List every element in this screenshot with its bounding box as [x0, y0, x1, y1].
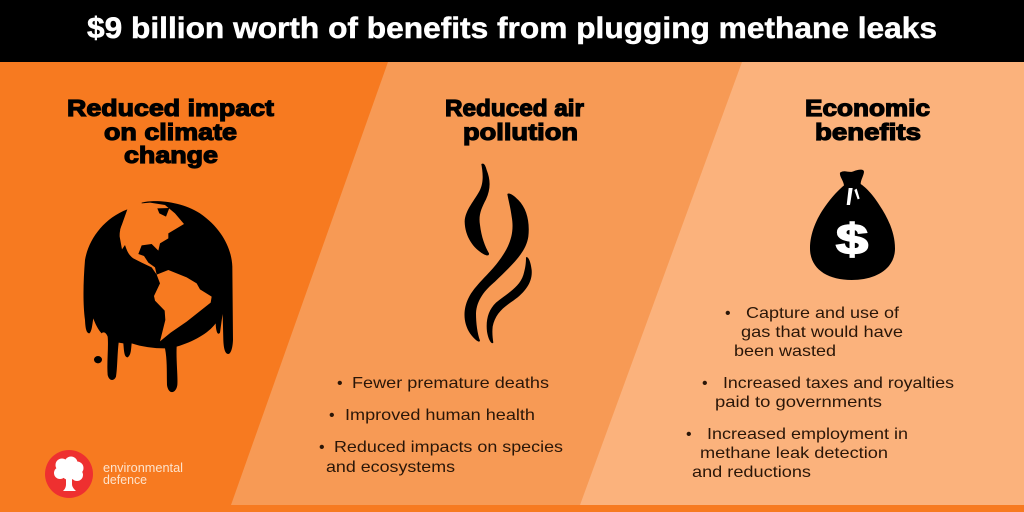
title banner — [0, 0, 1024, 62]
heading: reduced impact on climate change: change — [124, 142, 218, 168]
text block: air pollution bullets: Fewer premature deaths — [352, 375, 549, 392]
logo: environmental defence: defence — [103, 473, 147, 487]
text block: economic bullets: gas that would have — [741, 324, 903, 341]
text block: economic bullets: Increased taxes and royalties — [723, 375, 954, 392]
heading: reduced impact on climate change: on climate — [104, 119, 237, 145]
text block: economic bullets: paid to governments — [715, 394, 882, 411]
logo: environmental defence: environmental — [103, 461, 183, 475]
south america — [154, 270, 212, 341]
text block: economic bullets: and reductions — [692, 464, 811, 481]
panel: economic background — [580, 62, 1024, 505]
icon: rising smoke — [464, 164, 532, 343]
heading: reduced air pollution: Reduced air — [445, 95, 584, 121]
text block: air pollution bullets: • — [319, 439, 325, 456]
heading: economic benefits: Economic — [805, 95, 930, 121]
text block: economic bullets: • — [702, 375, 708, 392]
heading: economic benefits: benefits — [815, 119, 921, 145]
heading: reduced impact on climate change: Reduced impact — [67, 95, 274, 121]
text block: economic bullets: • — [686, 426, 692, 443]
text block: economic bullets: methane leak detection — [700, 445, 888, 462]
icon: melting globe — [83, 201, 233, 392]
text block: air pollution bullets: • — [329, 407, 335, 424]
heading: economic benefits — [805, 95, 930, 145]
text block: economic bullets: been wasted — [734, 343, 836, 360]
text block: air pollution bullets: and ecosystems — [326, 459, 455, 476]
heading: reduced air pollution — [445, 95, 584, 145]
text block: air pollution bullets — [319, 375, 563, 476]
text block: air pollution bullets: Improved human health — [345, 407, 535, 424]
text block: air pollution bullets: • — [337, 375, 343, 392]
icon: money bag — [810, 170, 895, 280]
text block: economic bullets: • — [725, 305, 731, 322]
text block: economic bullets: Capture and use of — [746, 305, 900, 322]
title banner: $9 billion worth of benefits from plugging methane leaks — [87, 12, 937, 45]
logo: environmental defence — [45, 450, 183, 498]
text block: economic bullets — [686, 305, 954, 481]
icon: money bag: $ — [836, 215, 868, 263]
text block: air pollution bullets: Reduced impacts on species — [334, 439, 563, 456]
north america — [120, 203, 184, 275]
heading: reduced impact on climate change — [67, 95, 274, 168]
text block: economic bullets: Increased employment in — [707, 426, 908, 443]
heading: reduced air pollution: pollution — [463, 119, 578, 145]
panel: air pollution background — [231, 62, 1024, 505]
